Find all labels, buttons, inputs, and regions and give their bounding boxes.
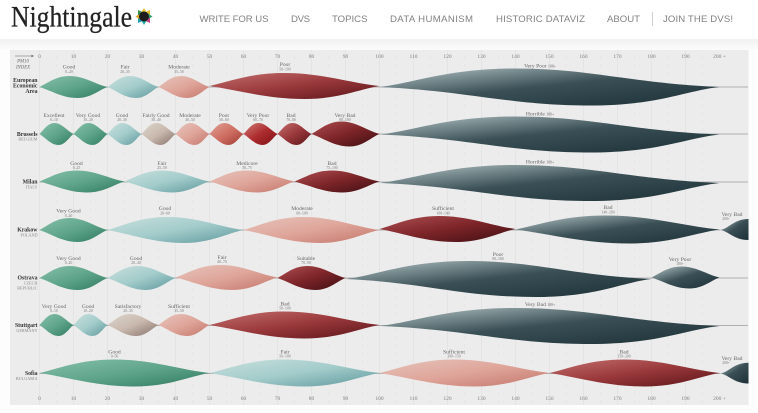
band: Good: 20–60: [160, 212, 170, 216]
band: Good: [40, 350, 210, 386]
band: Good: 0–50: [111, 354, 118, 358]
row: European Economic Area: [13, 62, 748, 106]
top axis: 10: [71, 54, 76, 60]
row label: European: [13, 78, 38, 84]
band: Good: [108, 113, 142, 145]
band: Bad: Bad: [280, 302, 290, 308]
band: Medicore: 50–75: [242, 166, 252, 170]
band: Sufficient: Sufficient: [168, 303, 190, 310]
band: Good: 20–30: [117, 118, 127, 122]
row label: BELGIUM: [18, 136, 38, 142]
band: Bad: 75–100: [326, 166, 338, 170]
row label: GERMANY: [16, 328, 38, 333]
row label: Krakow: [17, 228, 38, 234]
band: Bad: [278, 113, 312, 145]
row label: [17, 276, 38, 290]
bottom axis: 30: [139, 396, 144, 402]
navigation: JOIN THE DVS!: [663, 14, 733, 25]
band: Fair: Fair: [157, 161, 167, 167]
row label: Area: [25, 89, 38, 95]
band: Medicore: [210, 161, 294, 192]
band: Medicore: Medicore: [236, 161, 258, 167]
bottom axis: 40: [173, 396, 178, 402]
top axis: 20: [105, 54, 110, 60]
bottom axis: 200 +: [713, 396, 726, 402]
band: Sufficient: [380, 348, 550, 386]
band: Bad: [210, 302, 380, 338]
top axis: 60: [241, 54, 246, 60]
band: Bad: 70–80: [286, 118, 296, 122]
band: Bad: Bad: [327, 161, 337, 167]
navigation: ABOUT: [607, 14, 640, 25]
top axis: 110: [409, 54, 418, 60]
band: Very Good: 10–20: [83, 118, 93, 122]
bottom axis: 60: [241, 396, 246, 402]
bottom axis: 150: [545, 396, 554, 402]
band: Very Good: [74, 113, 108, 145]
band: Excellent: Excellent: [43, 113, 65, 119]
row label: [13, 78, 38, 95]
band: Fair: 25–50: [157, 166, 167, 170]
band: Bad: Bad: [619, 350, 629, 356]
band: Very Poor: Very Poor: [247, 113, 269, 119]
band: Horrible: Horrible 100+: [526, 160, 554, 166]
top axis: 30: [139, 54, 144, 60]
band: Moderate: 35–50: [174, 70, 184, 74]
top axis: 0: [38, 54, 41, 60]
bottom axis: 50: [207, 396, 212, 402]
row: Sofia: [16, 348, 748, 386]
band: Good: Good: [130, 256, 142, 262]
row label: REPUBLIC: [17, 286, 38, 290]
band: Good: Good: [70, 161, 83, 167]
band: Sufficient: 100–140: [436, 212, 450, 216]
bottom axis: 120: [443, 396, 452, 402]
header: [11, 0, 733, 34]
bottom axis: 110: [409, 396, 418, 402]
band: Good: [40, 161, 124, 192]
band: Bad: 140–200: [601, 210, 615, 214]
top axis: 160: [579, 54, 588, 60]
band: Fair: [210, 350, 380, 386]
row label: [17, 132, 38, 142]
band: Poor: Poor: [219, 113, 229, 119]
bottom axis: 160: [579, 396, 588, 402]
row label: [17, 228, 38, 238]
band: Poor: 90–180: [492, 257, 504, 261]
bottom axis: 20: [105, 396, 110, 402]
band: Horrible: [380, 160, 720, 201]
band: Bad: 150–200: [617, 354, 631, 358]
band: Very Bad: 200+: [722, 361, 730, 365]
band: Horrible: Horrible 100+: [526, 112, 554, 118]
band: Sufficient: Sufficient: [443, 348, 465, 356]
band: Bad: [516, 205, 720, 244]
band: Fairly Good: 30–40: [151, 118, 161, 122]
band: Sufficient: [158, 303, 210, 336]
band: Very Bad: [312, 113, 380, 146]
row label: Brussels: [17, 132, 38, 138]
band: Good: Good: [108, 350, 121, 356]
band: Very Bad: Very Bad: [722, 212, 743, 218]
band: Fair: 40–70: [217, 260, 227, 264]
band: Very Poor: Very Poor 100+: [524, 64, 556, 70]
row label: ITALY: [26, 184, 38, 190]
bottom axis: 180: [647, 396, 656, 402]
band: Very Poor: 180+: [676, 262, 684, 266]
band: Very Good: [40, 208, 108, 242]
band: Very Bad: [719, 356, 748, 384]
band: Moderate: [158, 64, 210, 98]
band: Sufficient: [380, 205, 516, 242]
band: Very Poor: [652, 257, 720, 288]
row: Brussels: [17, 112, 748, 152]
band: Very Bad: Very Bad 100+: [525, 302, 555, 308]
row label: POLAND: [21, 232, 38, 238]
row label: [23, 180, 38, 190]
navigation: [200, 12, 733, 26]
top axis: 100: [375, 54, 384, 60]
band: Sufficient: 35–50: [174, 309, 184, 313]
band: Moderate: 40–50: [185, 118, 195, 122]
bottom axis: 190: [681, 396, 690, 402]
bottom axis: 140: [511, 396, 520, 402]
band: Fair: 50–100: [279, 354, 291, 358]
bottom axis: 0: [38, 396, 41, 402]
top axis: 70: [275, 54, 280, 60]
row label: CZECH: [24, 280, 38, 286]
band: Good: Good: [63, 64, 75, 70]
band: Very Good: Very Good: [56, 208, 81, 214]
band: Sufficient: Sufficient: [432, 205, 454, 212]
band: Very Poor: 60–70: [253, 118, 263, 122]
row: Ostrava: [17, 252, 748, 297]
band: Very Bad: 80–100: [339, 118, 351, 122]
band: Fair: Fair: [217, 255, 227, 261]
band: Excellent: [40, 113, 74, 145]
band: Very Poor: [380, 64, 720, 106]
bottom axis: 170: [613, 396, 622, 402]
top axis: 190: [681, 54, 690, 60]
row label: Sofia: [25, 371, 38, 377]
navigation: DATA HUMANISM: [390, 14, 473, 25]
band: Satisfactory: [108, 303, 158, 336]
band: Good: 0–25: [73, 166, 80, 170]
row label: [16, 371, 38, 381]
band: Good: 20–40: [131, 261, 141, 265]
navigation: WRITE FOR US: [200, 14, 268, 25]
band: Moderate: [244, 206, 380, 243]
row label: Milan: [23, 180, 38, 186]
band: Very Bad: [719, 212, 748, 240]
band: Very Poor: Very Poor: [669, 257, 691, 263]
band: Fair: [108, 64, 158, 98]
top axis: 200 +: [713, 54, 726, 60]
bottom axis: 80: [309, 396, 314, 402]
band: Fair: [176, 255, 278, 290]
navigation: TOPICS: [332, 14, 368, 25]
band: Poor: Poor: [280, 62, 290, 68]
band: Bad: 50–100: [279, 306, 291, 310]
band: Poor: 50–60: [219, 118, 229, 122]
band: Good: 10–20: [83, 309, 93, 313]
band: Poor: [210, 62, 380, 99]
band: Good: Good: [116, 113, 128, 119]
band: Very Good: Very Good: [56, 256, 81, 262]
band: Very Bad: Very Bad: [335, 113, 356, 119]
top axis: 80: [309, 54, 314, 60]
band: Satisfactory: 20–35: [123, 309, 133, 313]
band: Fair: Fair: [120, 64, 130, 70]
bottom axis: 70: [275, 396, 280, 402]
band: Suitable: Suitable: [297, 256, 316, 262]
icon: nightingale star: [136, 8, 152, 25]
top axis: 120: [443, 54, 452, 60]
band: Bad: Bad: [603, 205, 613, 211]
row: Krakow: [17, 205, 748, 244]
band: Very Good: [40, 256, 108, 290]
band: Poor: [346, 252, 652, 297]
band: Fairly Good: [142, 113, 176, 145]
band: Sufficient: 100–150: [447, 354, 461, 358]
band: Fairly Good: Fairly Good: [142, 113, 170, 119]
band: Excellent: 0–10: [50, 118, 58, 122]
band: Bad: [294, 161, 380, 192]
axis title: PM10 index: INDEX: [15, 66, 31, 70]
band: Very Good: 0–10: [50, 309, 58, 313]
bottom axis: 10: [71, 396, 76, 402]
band: Moderate: Moderate: [168, 64, 190, 70]
row label: Economic: [13, 84, 38, 90]
band: Moderate: 60–100: [296, 212, 308, 216]
band: Poor: Poor: [493, 252, 503, 258]
band: Moderate: [176, 113, 210, 145]
top axis: [38, 54, 726, 60]
bottom axis: 90: [343, 396, 348, 402]
band: Good: Good: [159, 206, 171, 212]
band: Very Good: [40, 304, 74, 336]
row label: [15, 323, 38, 333]
axis title: PM10 index: PM10: [16, 60, 29, 64]
band: Very Bad: [380, 302, 720, 344]
top axis: 150: [545, 54, 554, 60]
band: Suitable: [278, 256, 346, 290]
top axis: 180: [647, 54, 656, 60]
band: Good: [74, 304, 108, 336]
band: Very Good: 0–20: [65, 214, 72, 218]
bottom axis: 130: [477, 396, 486, 402]
band: Fair: Fair: [280, 350, 290, 356]
top axis: 40: [173, 54, 178, 60]
band: Very Good: Very Good: [76, 113, 100, 119]
navigation: HISTORIC DATAVIZ: [496, 14, 585, 25]
row label: Stuttgart: [15, 323, 38, 329]
band: Bad: Bad: [286, 113, 296, 119]
band: Good: Good: [82, 304, 94, 310]
top axis: 90: [343, 54, 348, 60]
top axis: 170: [613, 54, 622, 60]
band: Bad: [550, 350, 720, 386]
top axis: 140: [511, 54, 520, 60]
band: Good: [40, 64, 108, 98]
band: Fair: 20–35: [120, 70, 130, 74]
band: Moderate: Moderate: [291, 206, 313, 212]
top axis: 50: [207, 54, 212, 60]
bottom axis: 100: [375, 396, 384, 402]
logo wordmark: Nightingale: [11, 0, 132, 34]
band: Suitable: 70–90: [301, 261, 311, 265]
axis title: PM10 index: [15, 55, 34, 70]
row: Stuttgart: [15, 302, 748, 344]
band: Good: [108, 206, 244, 243]
band: Good: 0–20: [65, 70, 73, 74]
band: Very Good: 0–20: [65, 261, 72, 265]
band: Very Bad: 200+: [722, 217, 730, 221]
band: Very Good: Very Good: [42, 304, 66, 310]
band: Good: [108, 256, 176, 290]
navigation: DVS: [291, 14, 310, 25]
band: Satisfactory: Satisfactory: [115, 303, 142, 310]
bottom axis: [38, 396, 726, 402]
band: Moderate: Moderate: [179, 113, 201, 119]
top axis: 130: [477, 54, 486, 60]
band: Fair: [124, 161, 210, 192]
band: Poor: 50–100: [279, 68, 291, 72]
band: Very Poor: [244, 113, 278, 145]
band: Very Bad: Very Bad: [722, 356, 743, 362]
row label: Ostrava: [18, 276, 38, 282]
band: Poor: [210, 113, 244, 145]
row: Milan: [23, 160, 748, 201]
band: Horrible: [380, 112, 720, 152]
row label: BULGARIA: [16, 376, 38, 381]
